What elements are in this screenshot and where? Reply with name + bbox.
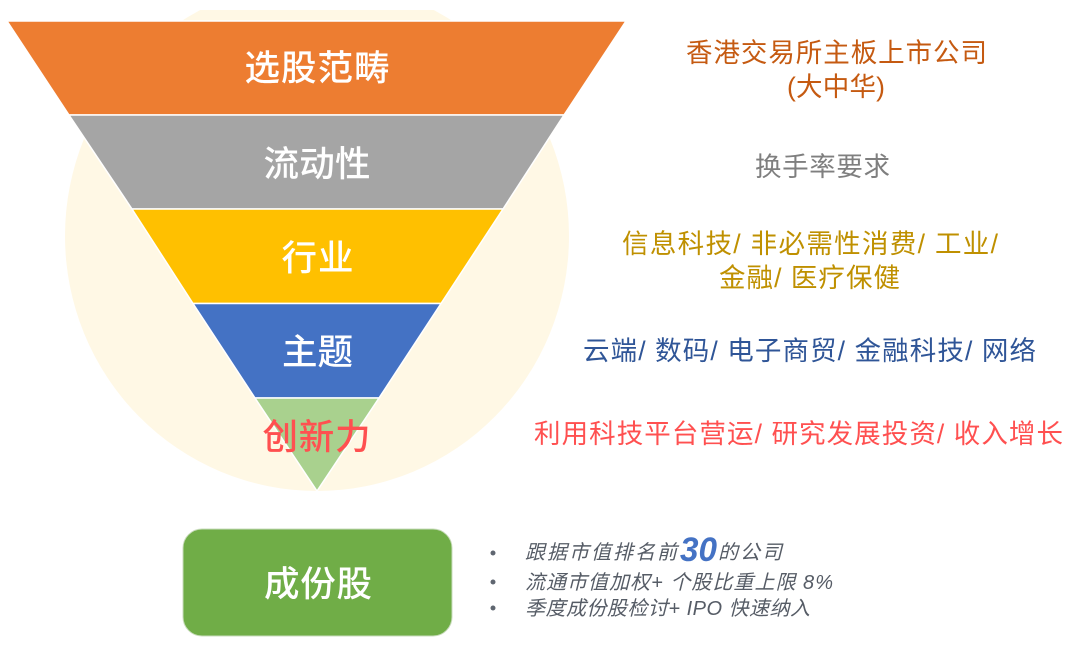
description: 选股范畴 [686,38,987,102]
heading: 主题: 主题 [282,332,353,372]
description line 2: 金融/ 医疗保健 [719,263,900,293]
bullet 1 [490,531,784,569]
heading: 流动性: 流动性 [264,144,370,184]
bullet 1: 跟据市值排名前 [525,542,680,564]
bullet list [490,531,833,620]
heading: 行业: 行业 [282,238,354,278]
funnel tier: green [255,398,379,491]
funnel tier: blue [193,304,441,398]
description: 流动性: 换手率要求 [755,152,890,182]
description line 1: 香港交易所主板上市公司 [686,38,987,68]
description line 2: (大中华) [787,72,885,102]
funnel [7,21,626,491]
background circle [65,0,569,491]
bullet 1: 的公司 [718,542,784,564]
bullet 1: 30 [680,531,717,569]
bullet 3: 季度成份股检讨+ IPO 快速纳入 [525,598,810,620]
box label: 成份股 [264,564,372,604]
funnel tier: gray [69,115,564,209]
funnel tier: orange [7,21,626,115]
description: 创新力: 利用科技平台营运/ 研究发展投资/ 收入增长 [534,419,1063,449]
description: 主题: 云端/ 数码/ 电子商贸/ 金融科技/ 网络 [583,336,1036,366]
description: 行业 [622,229,999,293]
heading: 选股范畴: 选股范畴 [244,48,390,88]
green rounded box [183,529,452,636]
heading: 创新力: 创新力 [262,417,370,457]
description line 1: 信息科技/ 非必需性消费/ 工业/ [622,229,999,259]
bullet 2: 流通市值加权+ 个股比重上限 8% [525,572,833,594]
constituents box [183,529,452,636]
funnel tier: yellow [132,209,503,304]
